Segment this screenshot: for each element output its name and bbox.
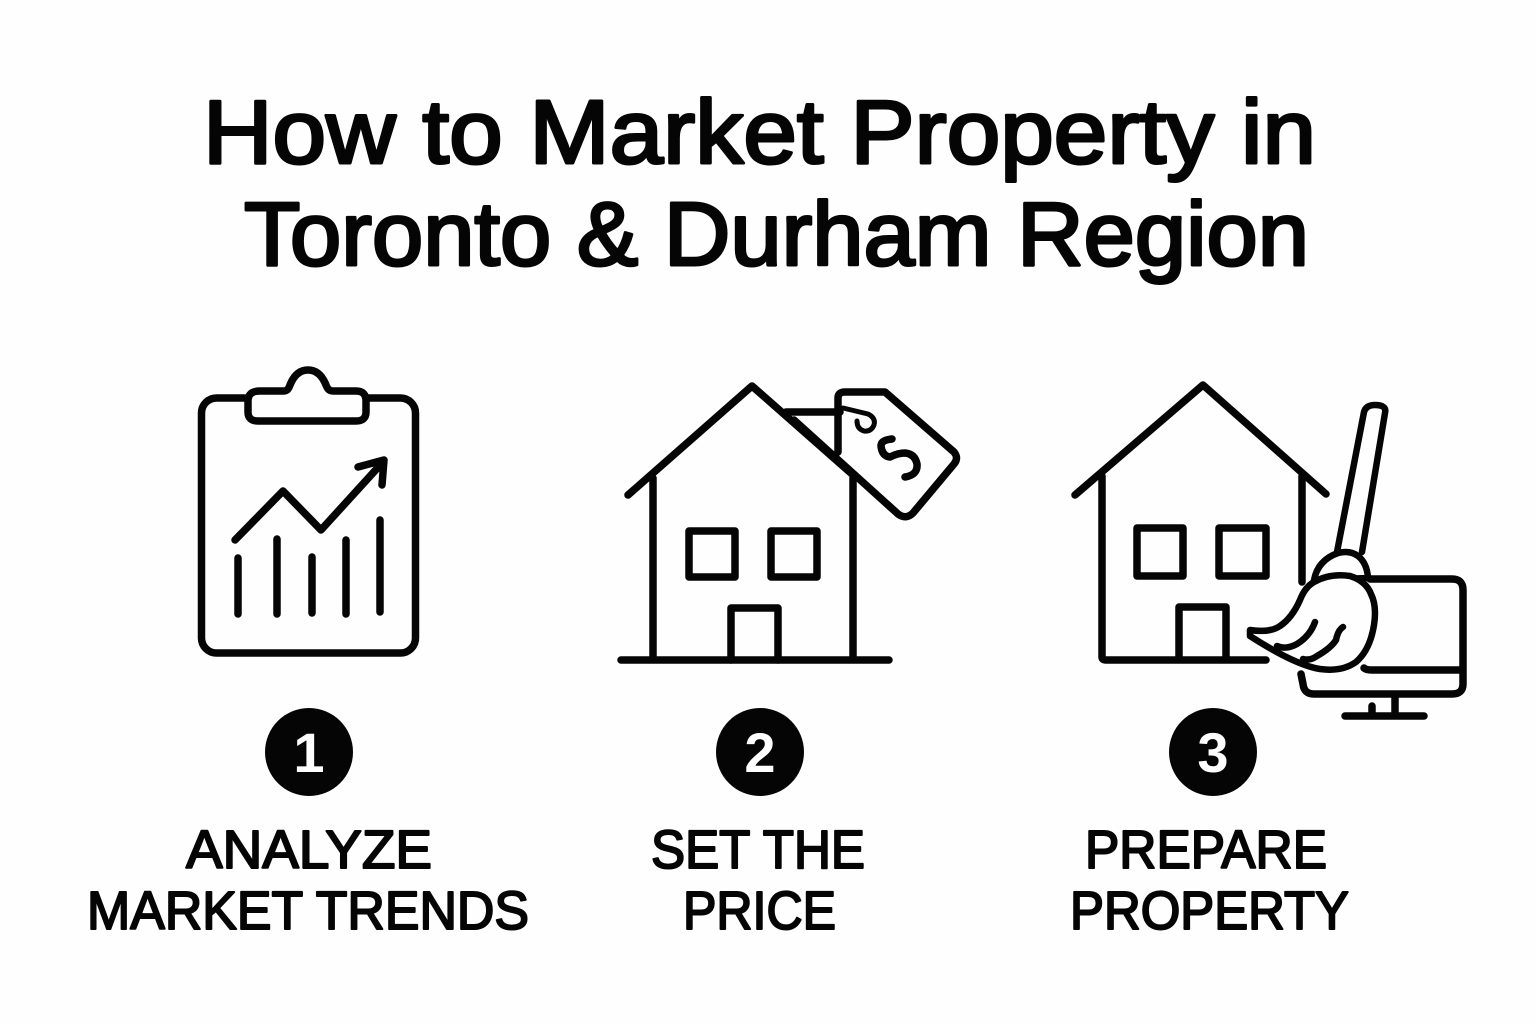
clipboard board bbox=[202, 398, 416, 653]
house door bbox=[1179, 607, 1226, 657]
step label 3 bbox=[1070, 820, 1349, 941]
icon: clipboard with rising chart bbox=[202, 370, 416, 653]
step label 2 bbox=[651, 820, 865, 941]
bar chart bbox=[238, 520, 380, 614]
clipboard clip bbox=[248, 370, 366, 421]
house outline bbox=[621, 386, 889, 660]
icon: house with price tag bbox=[621, 386, 956, 660]
panel: step 2 set the price bbox=[621, 386, 956, 941]
dollar sign bbox=[881, 439, 917, 477]
step number 2 bbox=[716, 708, 804, 796]
price tag bbox=[786, 392, 956, 517]
house windows bbox=[689, 531, 817, 577]
step label 1 bbox=[87, 820, 529, 941]
title: Toronto & Durham Region bbox=[244, 185, 1309, 285]
house windows bbox=[1137, 528, 1266, 576]
step number 1 bbox=[265, 708, 353, 796]
trend line with arrow bbox=[235, 460, 384, 540]
step label 2: SET THE bbox=[651, 820, 865, 880]
step number 2: 2 bbox=[744, 721, 776, 784]
step label 2: PRICE bbox=[683, 881, 836, 941]
panel: step 1 analyze market trends bbox=[87, 370, 529, 941]
broom handle bbox=[1337, 405, 1385, 552]
icon: house with broom and monitor bbox=[1075, 385, 1463, 716]
house outline bbox=[1075, 385, 1326, 660]
tag string and hole bbox=[843, 408, 874, 431]
step number 3 bbox=[1169, 708, 1257, 796]
bristle lines bbox=[1277, 622, 1343, 660]
step label 1: MARKET TRENDS bbox=[87, 881, 529, 941]
step number 1: 1 bbox=[293, 721, 325, 784]
title bbox=[203, 83, 1316, 285]
step label 1: ANALYZE bbox=[186, 820, 432, 880]
title: How to Market Property in bbox=[203, 83, 1316, 183]
step number 3: 3 bbox=[1197, 721, 1229, 784]
monitor bbox=[1301, 579, 1463, 716]
step label 3: PROPERTY bbox=[1070, 881, 1349, 941]
broom bristles bbox=[1250, 575, 1375, 670]
broom ferrule bbox=[1314, 552, 1368, 580]
house door bbox=[731, 608, 778, 660]
panel: step 3 prepare property bbox=[1070, 385, 1463, 941]
step label 3: PREPARE bbox=[1085, 820, 1327, 880]
